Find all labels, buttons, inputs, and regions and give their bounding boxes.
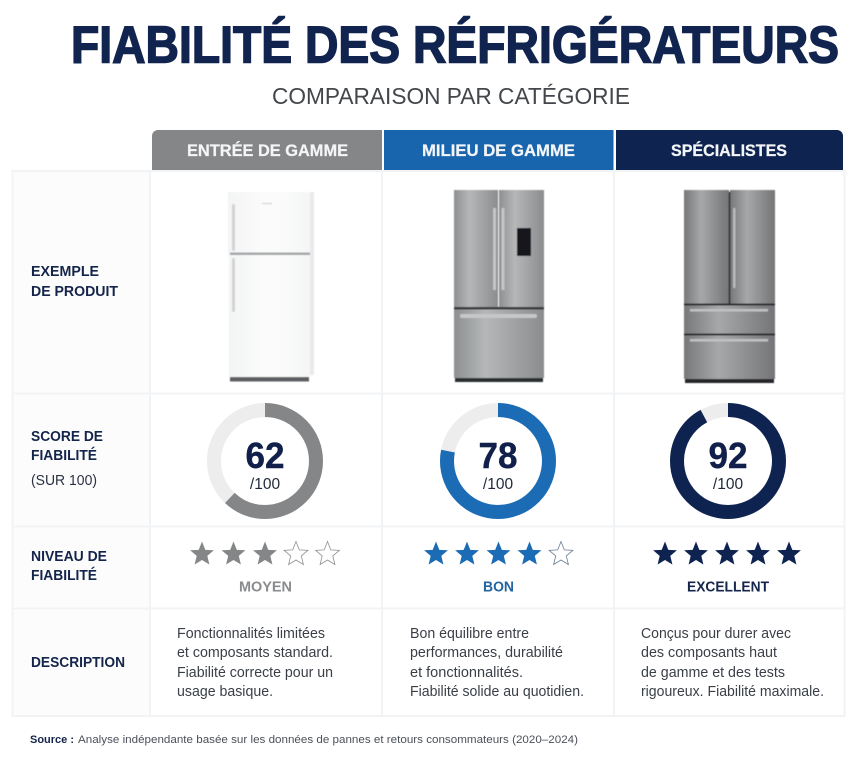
- description: milieu de gamme: et fonctionnalités.: [410, 665, 523, 681]
- row label: niveau de fiabilité: NIVEAU DE: [31, 549, 107, 565]
- row label: exemple de produit: [31, 264, 118, 300]
- row label: niveau de fiabilité: [31, 549, 107, 584]
- column header: spécialistes: SPÉCIALISTES: [671, 141, 787, 160]
- donut score 92: /100: [713, 476, 743, 493]
- donut score 62: [214, 410, 316, 512]
- row label: description: DESCRIPTION: [31, 655, 125, 671]
- description: spécialistes: Conçus pour durer avec: [641, 626, 791, 642]
- row label: score de fiabilité: SCORE DE: [31, 429, 103, 445]
- description: spécialistes: [641, 626, 824, 700]
- column header: spécialistes: [616, 130, 843, 170]
- description: spécialistes: de gamme et des tests: [641, 665, 785, 681]
- column header: entrée de gamme: ENTRÉE DE GAMME: [187, 141, 348, 160]
- description: spécialistes: des composants haut: [641, 645, 777, 661]
- dark stainless four-door fridge: [684, 190, 775, 383]
- comparison table: [12, 130, 845, 716]
- row label: exemple de produit: DE PRODUIT: [31, 284, 118, 300]
- donut score 62: /100: [250, 476, 280, 493]
- donut score 78: 78: [478, 435, 518, 476]
- white fridge: [228, 192, 314, 382]
- subtitle: COMPARAISON PAR CATÉGORIE: [272, 83, 630, 109]
- row label: niveau de fiabilité: FIABILITÉ: [31, 567, 97, 584]
- stars: excellent: EXCELLENT: [687, 580, 769, 596]
- stars: bon: [424, 542, 573, 596]
- description: spécialistes: rigoureux. Fiabilité maximale.: [641, 684, 824, 700]
- description: milieu de gamme: Fiabilité solide au quotidien.: [410, 684, 584, 700]
- stars: bon: BON: [483, 580, 514, 596]
- row label: score de fiabilité: [31, 429, 103, 489]
- stars: moyen: [190, 542, 339, 596]
- description: entrée de gamme: usage basique.: [177, 684, 273, 700]
- column header: milieu de gamme: MILIEU DE GAMME: [422, 142, 575, 160]
- stars: moyen: MOYEN: [239, 580, 292, 596]
- table grid: [12, 171, 845, 716]
- donut score 78: [447, 410, 549, 512]
- donut score 92: 92: [708, 435, 748, 476]
- description: entrée de gamme: Fonctionnalités limitées: [177, 626, 325, 642]
- source note: Analyse indépendante basée sur les données de pannes et retours consommateurs (2020–2024): [78, 734, 578, 746]
- stainless french-door fridge: [454, 190, 544, 382]
- donut score 78: /100: [483, 476, 513, 493]
- description: entrée de gamme: Fiabilité correcte pour un: [177, 665, 333, 681]
- description: milieu de gamme: Bon équilibre entre: [410, 626, 529, 642]
- column header: milieu de gamme: [384, 130, 614, 170]
- row label: score de fiabilité: (SUR 100): [31, 473, 97, 489]
- row label: score de fiabilité: FIABILITÉ: [31, 447, 97, 464]
- row label: exemple de produit: EXEMPLE: [31, 264, 99, 280]
- stars: excellent: [653, 542, 801, 596]
- description: entrée de gamme: [177, 626, 333, 700]
- source note: Source :: [30, 734, 74, 746]
- column header: entrée de gamme: [152, 130, 382, 170]
- donut score 92: [677, 410, 779, 512]
- description: milieu de gamme: performances, durabilité: [410, 645, 563, 661]
- description: milieu de gamme: [410, 626, 584, 700]
- donut score 62: 62: [246, 435, 284, 476]
- description: entrée de gamme: et composants standard.: [177, 645, 333, 661]
